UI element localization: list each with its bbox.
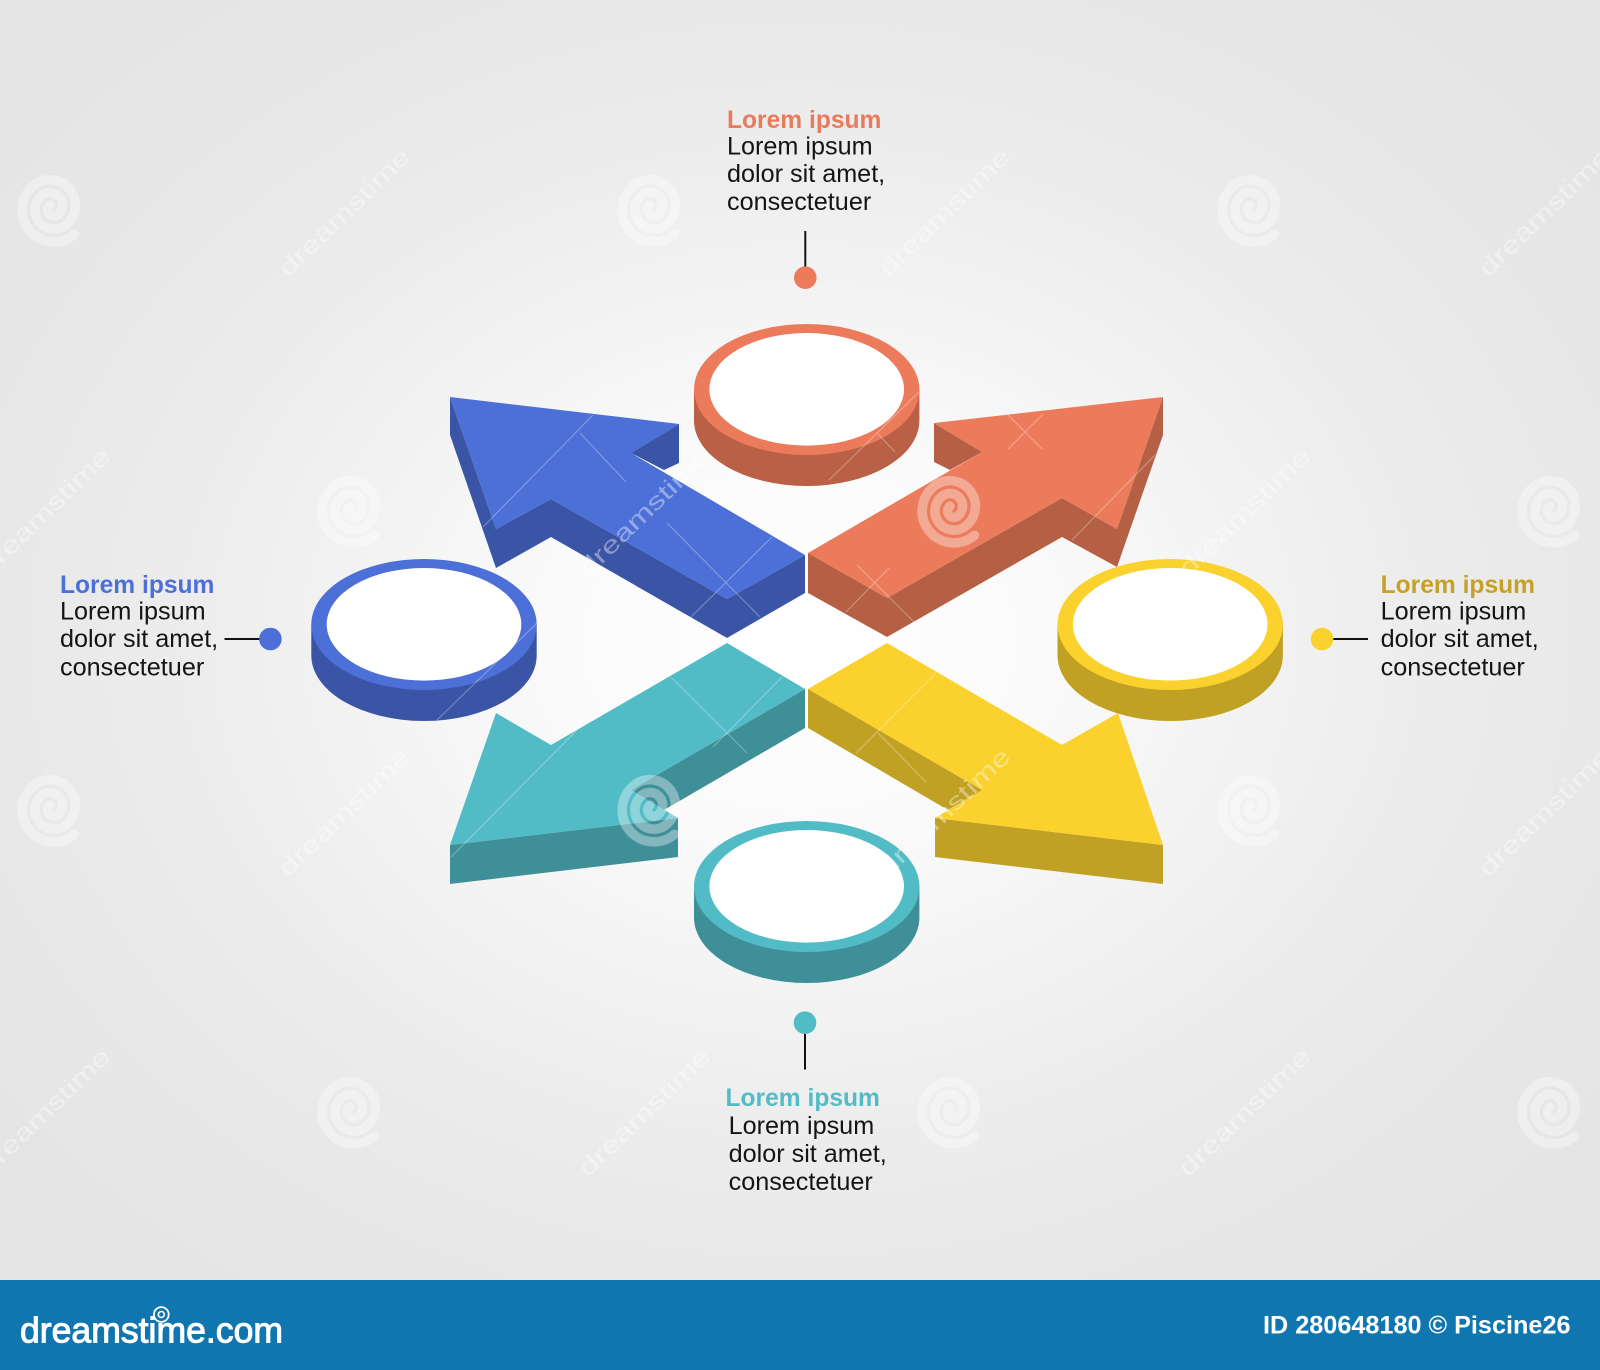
connector: blue [224,628,282,650]
text block: blue left: Lorem ipsum [60,572,214,599]
footer credit: ID 280648180 © Piscine26 [1263,1312,1570,1339]
watermark pattern: dreamstime [1174,443,1316,582]
text block: orange top: dolor sit amet, [727,160,885,188]
text block: blue left: Lorem ipsum [60,598,206,626]
text block: yellow right: consectetuer [1381,654,1525,682]
text block: yellow right: dolor sit amet, [1381,625,1539,653]
text block: orange top [727,107,885,216]
text block: orange top: consectetuer [727,188,871,216]
cylinder: yellow right [1058,559,1283,721]
text block: teal bottom: consectetuer [729,1168,873,1196]
arrow: orange up-right [808,397,1163,637]
watermark pattern: dreamstime [274,743,416,882]
connector: orange [794,231,817,289]
text block: blue left [60,572,218,682]
watermark pattern: dreamstime [274,143,416,282]
cylinder: blue left [311,559,537,721]
text block: orange top: Lorem ipsum [727,107,881,134]
watermark pattern: dreamstime [874,743,1016,882]
watermark pattern: dreamstime [1174,1043,1316,1182]
text block: yellow right: Lorem ipsum [1381,598,1526,626]
watermark pattern [0,143,1600,1182]
text block: yellow right: Lorem ipsum [1381,572,1535,599]
watermark pattern: dreamstime [1474,743,1600,882]
text block: teal bottom: Lorem ipsum [726,1085,880,1112]
footer logo: dreamstime.com [20,1310,283,1351]
arrow: yellow down-right [808,643,1163,884]
watermark pattern: dreamstime [874,143,1016,282]
text block: teal bottom [726,1085,887,1196]
arrow: blue up-left [450,397,805,638]
arrow: teal down-left [450,643,805,884]
text block: yellow right [1381,572,1539,682]
connector: yellow [1311,628,1368,650]
watermark pattern: dreamstime [574,443,716,582]
cylinder: teal bottom [694,821,919,983]
text block: teal bottom: Lorem ipsum [729,1112,874,1140]
cylinder: orange top [694,324,919,486]
footer bar [0,1280,1600,1370]
watermark pattern: dreamstime [1474,143,1600,282]
text block: teal bottom: dolor sit amet, [729,1140,887,1168]
text block: blue left: dolor sit amet, [60,625,218,653]
text block: blue left: consectetuer [60,654,204,682]
text block: orange top: Lorem ipsum [727,132,873,160]
connector: teal [794,1011,816,1070]
watermark pattern: dreamstime [574,1043,716,1182]
